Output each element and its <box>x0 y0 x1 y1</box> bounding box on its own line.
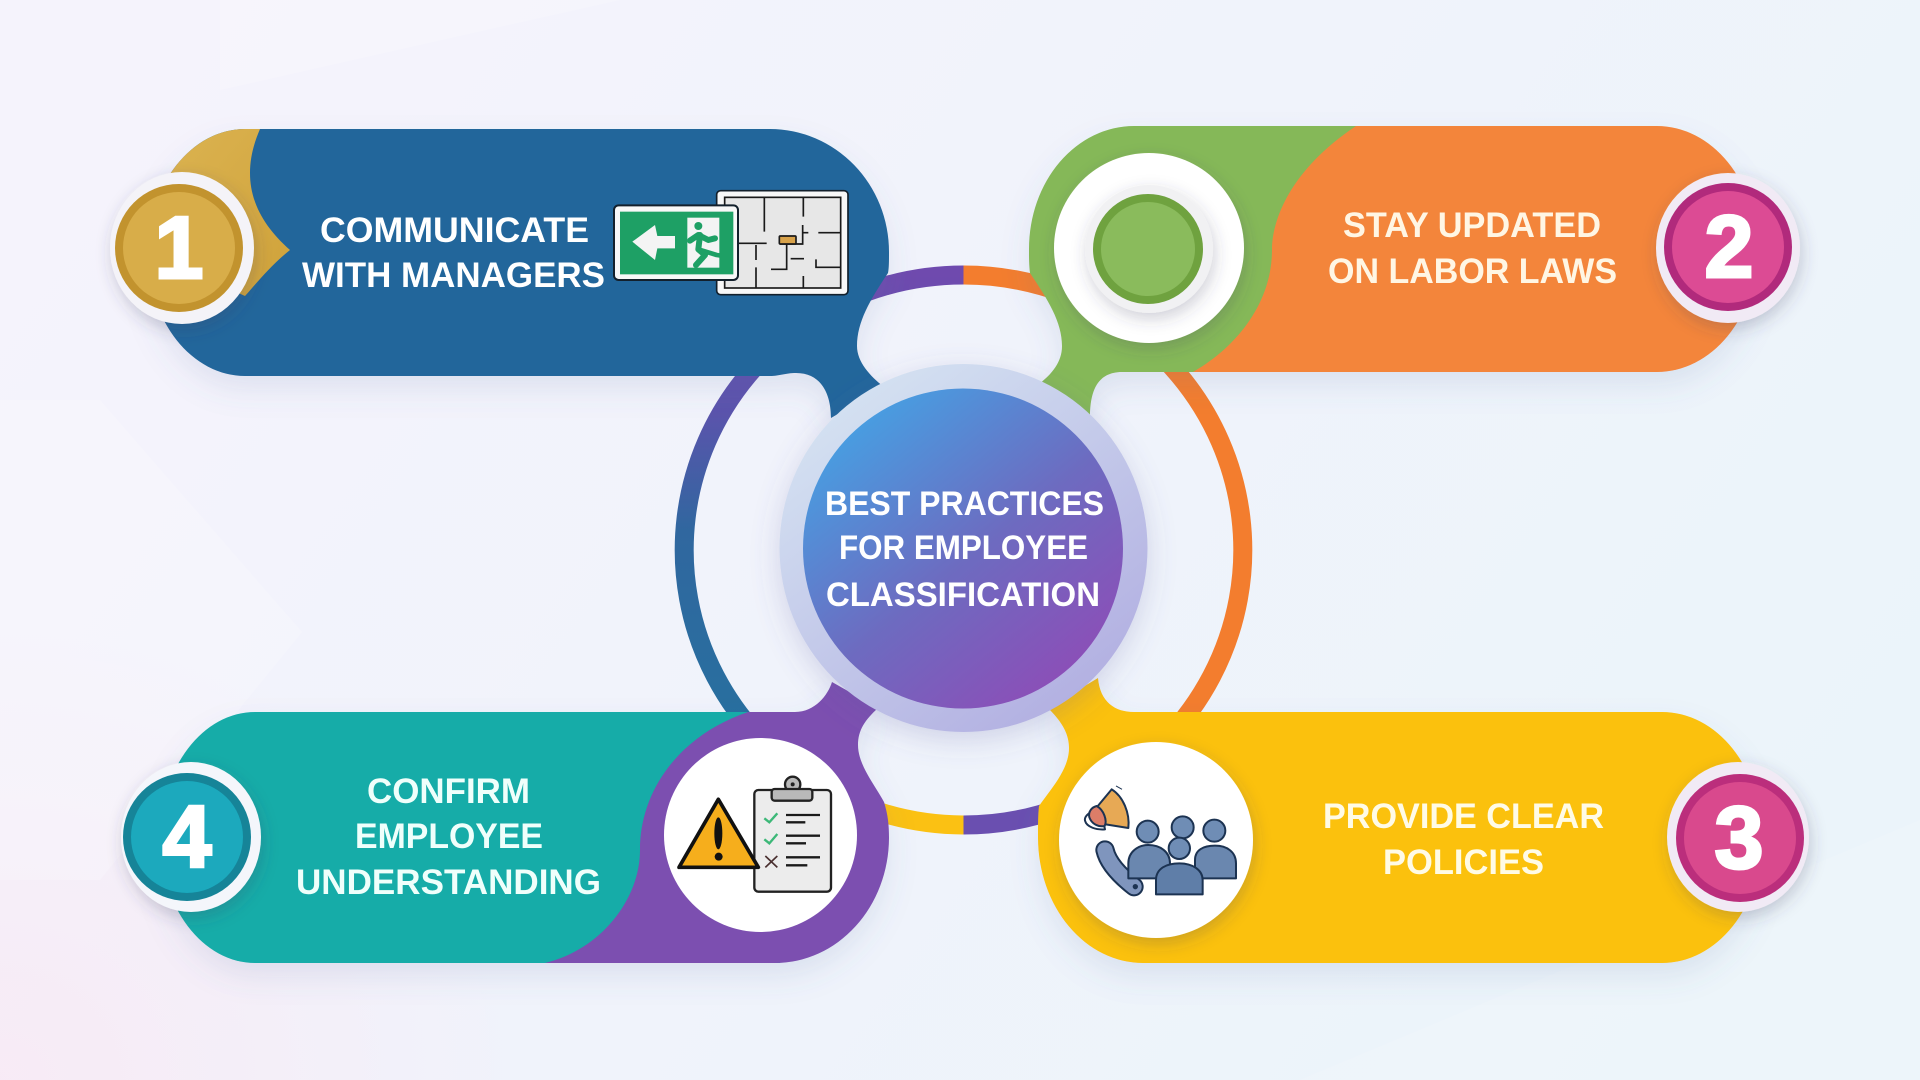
panel: communicate with managers <box>110 129 889 418</box>
badge 2: 2 <box>1705 197 1753 296</box>
label <box>296 772 601 902</box>
icon: warning and checklist <box>664 738 857 932</box>
label: EMPLOYEE <box>355 817 543 856</box>
hub title <box>825 485 1104 614</box>
badge 4: 4 <box>163 787 212 886</box>
label: STAY UPDATED <box>1343 206 1601 245</box>
label: ON LABOR LAWS <box>1328 252 1617 291</box>
label: WITH MANAGERS <box>302 256 605 295</box>
icon: announcement circle <box>1059 742 1253 938</box>
orange and green pill with neck <box>1029 126 1757 418</box>
badge 1 <box>110 172 254 324</box>
label: COMMUNICATE <box>320 211 589 250</box>
label: CONFIRM <box>367 772 530 811</box>
hub title: CLASSIFICATION <box>826 576 1100 614</box>
panel: provide clear policies <box>1038 678 1809 963</box>
badge 3: 3 <box>1715 788 1763 887</box>
label: PROVIDE CLEAR <box>1323 797 1604 836</box>
hub title: FOR EMPLOYEE <box>839 529 1088 567</box>
central hub <box>780 364 1148 732</box>
badge 1: 1 <box>155 198 203 297</box>
panel: stay updated on labor laws <box>1029 126 1800 418</box>
badge 2 <box>1656 173 1800 323</box>
label: UNDERSTANDING <box>296 863 601 902</box>
icon: green button <box>1054 153 1244 343</box>
badge 3 <box>1667 762 1809 912</box>
blue pill with neck <box>148 129 889 418</box>
teal and purple pill with neck <box>160 682 889 963</box>
label <box>302 211 605 295</box>
gold accent <box>148 129 290 296</box>
label <box>1323 797 1604 882</box>
panel: confirm employee understanding <box>121 682 889 963</box>
yellow pill with neck <box>1038 678 1762 963</box>
badge 4 <box>121 762 261 912</box>
hub title: BEST PRACTICES <box>825 485 1104 523</box>
label <box>1328 206 1617 291</box>
connecting ring <box>684 275 1243 825</box>
icon: floor plan with exit sign <box>614 191 848 295</box>
label: POLICIES <box>1383 843 1544 882</box>
